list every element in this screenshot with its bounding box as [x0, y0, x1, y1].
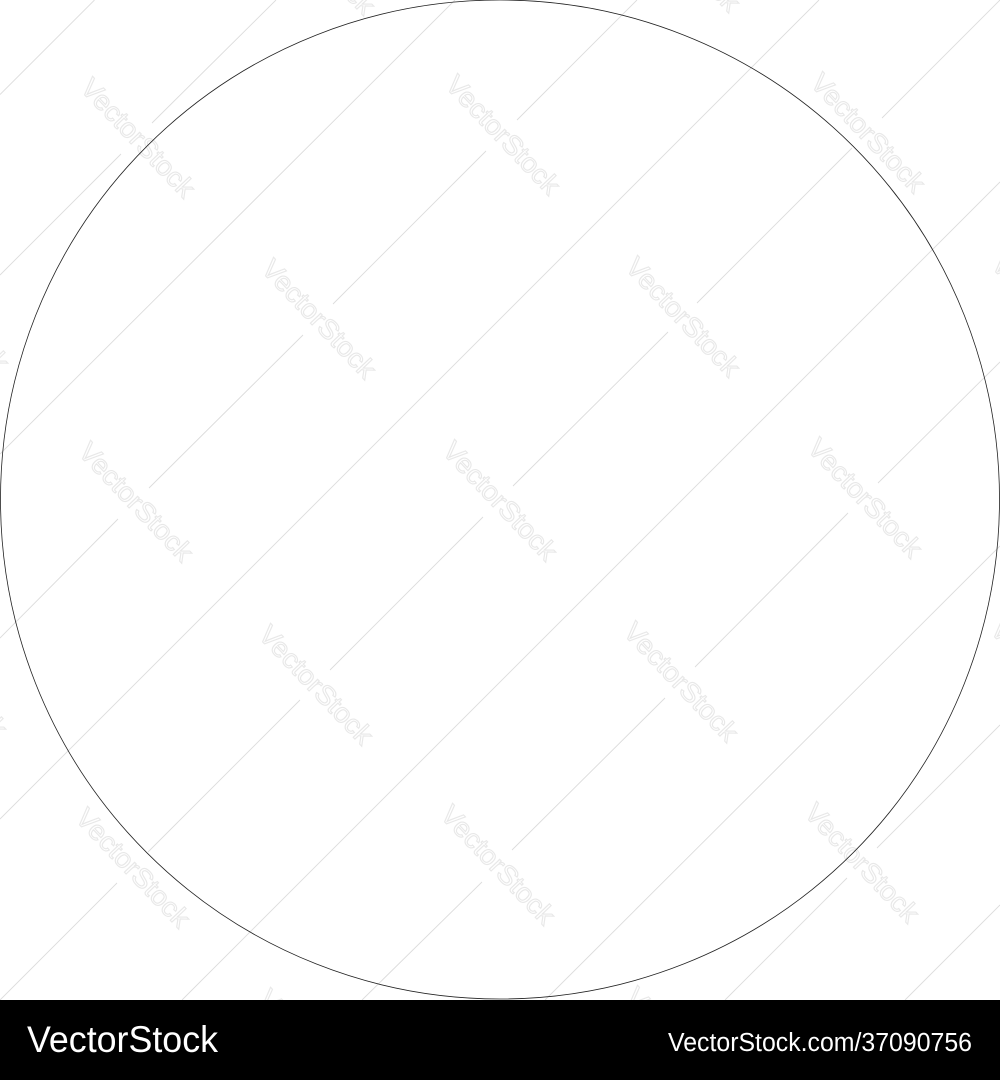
watermark pattern: VectorStock	[440, 69, 566, 201]
footer brand name: VectorStock	[27, 1019, 218, 1060]
watermark pattern: VectorStock	[75, 72, 201, 204]
footer image URL: VectorStock.com/37090756	[668, 1029, 972, 1057]
watermark pattern: VectorStock	[802, 432, 928, 564]
watermark pattern: VectorStock	[73, 436, 199, 568]
watermark pattern: VectorStock	[256, 253, 382, 385]
watermark pattern: VectorStock	[435, 799, 561, 931]
watermark pattern: VectorStock	[799, 797, 925, 929]
watermark pattern: VectorStock	[620, 251, 746, 383]
watermark pattern: VectorStock	[618, 616, 744, 748]
footer bar	[0, 1000, 1000, 1080]
watermark pattern: VectorStock	[805, 67, 931, 199]
watermark pattern: VectorStock	[437, 435, 563, 567]
watermark pattern: VectorStock	[253, 619, 379, 751]
watermark pattern: VectorStock	[70, 802, 196, 934]
